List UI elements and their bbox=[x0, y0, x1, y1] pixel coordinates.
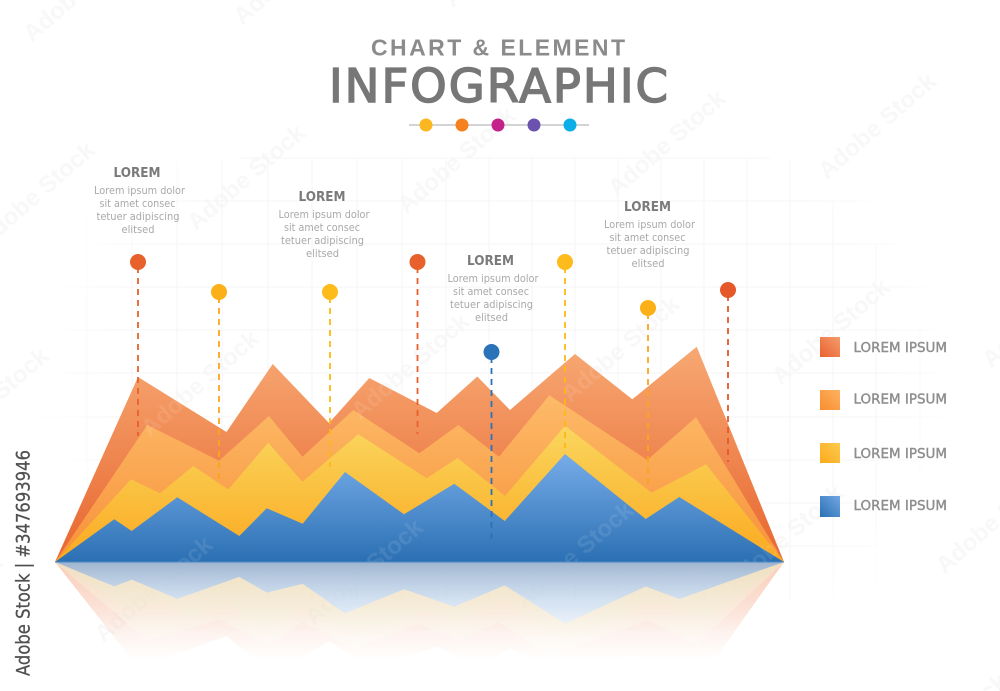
text block 2 bbox=[278, 190, 370, 260]
text block 2: sit amet consec bbox=[284, 222, 360, 234]
area chart bbox=[55, 347, 784, 562]
text block 1: LOREM bbox=[114, 166, 160, 181]
legend item: orange: LOREM IPSUM bbox=[854, 392, 947, 408]
legend item: orange bbox=[820, 390, 947, 410]
text block 4: Lorem ipsum dolor bbox=[604, 219, 696, 231]
decorative dot row bbox=[409, 118, 589, 132]
text block 4: sit amet consec bbox=[610, 232, 686, 244]
text block 3: Lorem ipsum dolor bbox=[448, 273, 539, 285]
legend bbox=[820, 337, 947, 517]
chart watermark overlay bbox=[55, 347, 784, 562]
text block 3: sit amet consec bbox=[453, 286, 529, 298]
text block 1 bbox=[94, 166, 186, 236]
text block 3: tetuer adipiscing bbox=[450, 299, 533, 311]
area: dark orange series bbox=[55, 347, 784, 562]
text block 3 bbox=[448, 254, 539, 324]
text block 4: elitsed bbox=[632, 258, 664, 270]
title bbox=[329, 34, 668, 113]
title: small heading: CHART & ELEMENT bbox=[371, 34, 625, 60]
legend item: blue bbox=[820, 496, 947, 517]
marker 2 bbox=[211, 284, 227, 484]
text block 2: LOREM bbox=[298, 190, 346, 205]
background grid bbox=[110, 158, 890, 574]
legend item: dark orange bbox=[820, 337, 947, 357]
text block 1: sit amet consec bbox=[100, 198, 176, 210]
text block 3: LOREM bbox=[467, 254, 514, 269]
vertical stock label: Adobe Stock | #347693946 bbox=[14, 450, 34, 676]
area: blue series bbox=[55, 454, 784, 562]
text block 2: elitsed bbox=[306, 248, 339, 260]
legend item: blue: LOREM IPSUM bbox=[854, 498, 947, 514]
text block 4: tetuer adipiscing bbox=[606, 245, 690, 257]
marker 3 bbox=[322, 284, 338, 467]
marker 8 bbox=[720, 282, 736, 462]
area: yellow series bbox=[55, 426, 784, 562]
text block 1: tetuer adipiscing bbox=[96, 211, 180, 223]
text block 2: tetuer adipiscing bbox=[281, 235, 364, 247]
marker 7 bbox=[640, 300, 656, 484]
marker 4 bbox=[410, 254, 426, 434]
legend item: yellow bbox=[820, 443, 947, 463]
title: main heading: INFOGRAPHIC bbox=[329, 59, 668, 113]
text block 4: LOREM bbox=[624, 200, 671, 215]
legend item: yellow: LOREM IPSUM bbox=[854, 446, 947, 462]
marker 1 bbox=[130, 254, 146, 436]
text block 3: elitsed bbox=[475, 312, 508, 324]
marker 6 bbox=[557, 254, 573, 448]
marker 5 bbox=[484, 344, 500, 544]
chart reflection bbox=[56, 562, 784, 646]
text block 2: Lorem ipsum dolor bbox=[278, 209, 370, 221]
text block 4 bbox=[604, 200, 696, 270]
legend item: dark orange: LOREM IPSUM bbox=[854, 340, 947, 356]
text block 1: Lorem ipsum dolor bbox=[94, 185, 186, 197]
text block 1: elitsed bbox=[122, 224, 154, 236]
area: orange series bbox=[55, 395, 784, 562]
